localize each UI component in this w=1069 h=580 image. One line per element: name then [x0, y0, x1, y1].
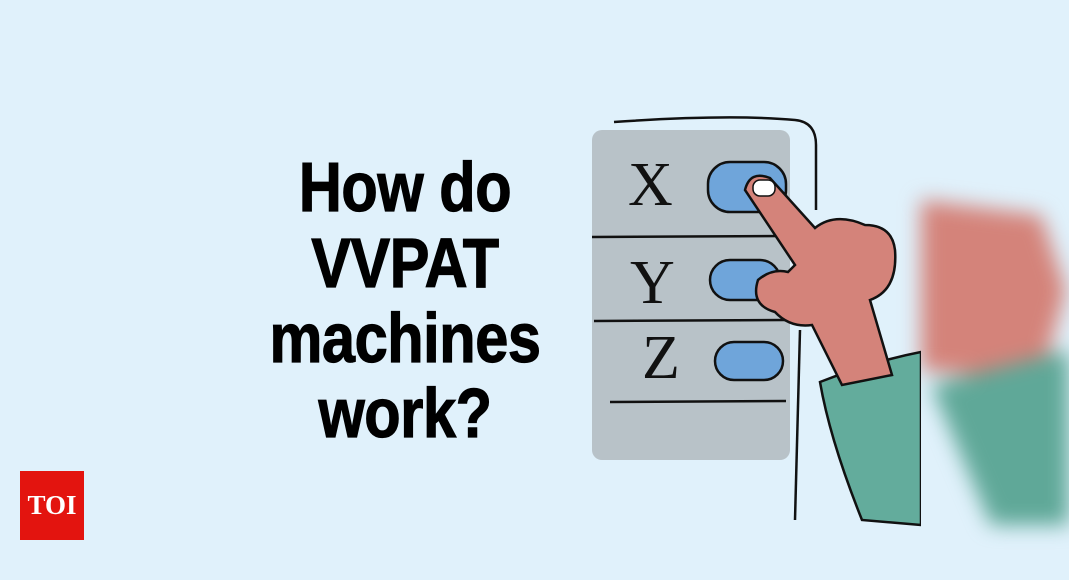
hand [745, 176, 895, 385]
ballot panel: X [628, 151, 673, 219]
ballot panel: Z [642, 324, 680, 392]
title: VVPAT [311, 224, 499, 302]
ballot panel: Y [630, 249, 675, 317]
sleeve [820, 352, 921, 525]
logo: TOI: TOI [27, 490, 77, 520]
title: work? [318, 374, 492, 452]
ballot panel [592, 130, 790, 460]
title [269, 148, 541, 452]
logo: TOI [20, 471, 84, 540]
title: How do [299, 148, 511, 226]
machine outline [614, 117, 816, 520]
title: machines [269, 299, 541, 377]
blurred background illustration [906, 187, 1069, 540]
illustration: voting machine with hand [592, 116, 921, 526]
